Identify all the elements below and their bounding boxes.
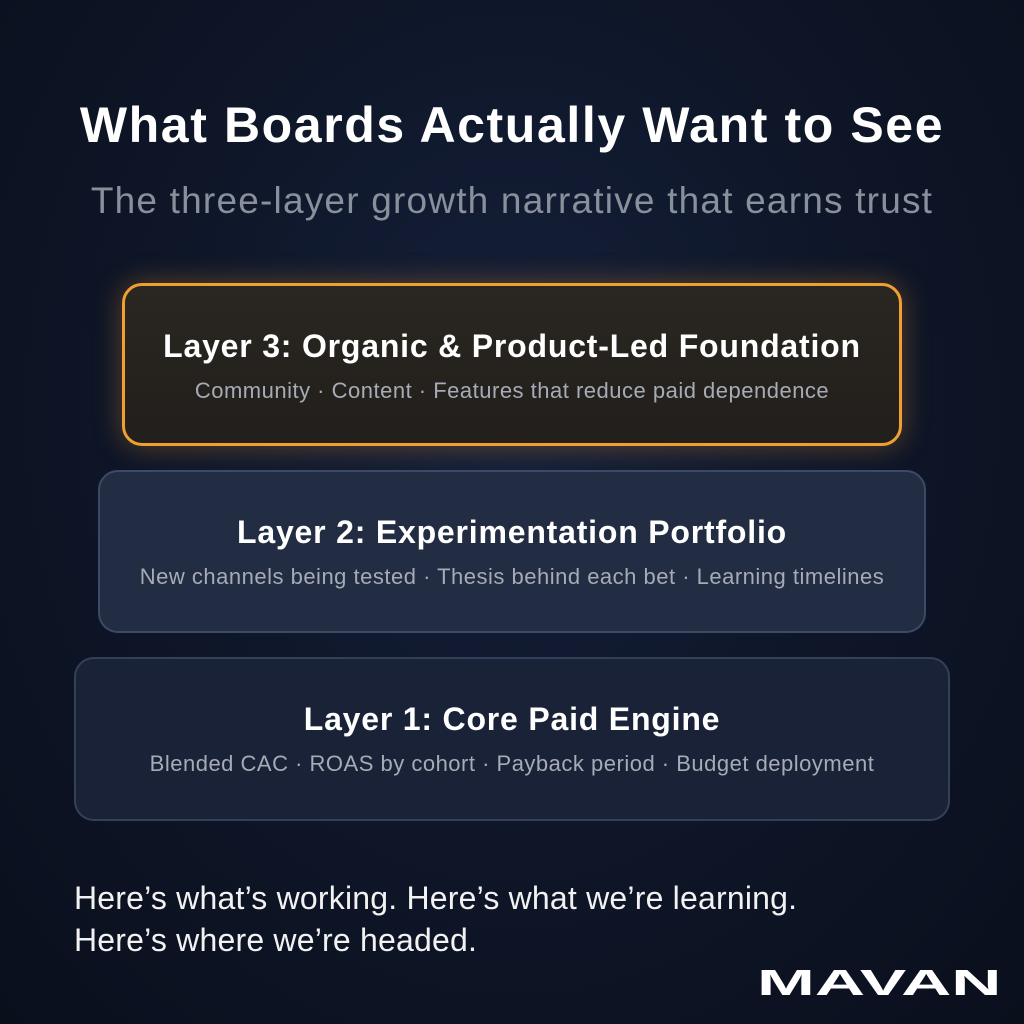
subtitle: The three-layer growth narrative that earns trust bbox=[91, 180, 933, 221]
footer text: Here’s where we’re headed. bbox=[74, 922, 477, 958]
panel: layer 2 bbox=[98, 470, 926, 633]
text: layer 1 details: Blended CAC · ROAS by cohort · Payback period · Budget deployment bbox=[150, 751, 874, 776]
footer text bbox=[74, 880, 797, 958]
logo: MAVAN bbox=[757, 962, 1001, 1003]
panel: layer 3 bbox=[122, 283, 902, 446]
panel: layer 1 bbox=[74, 657, 950, 821]
heading: layer 2: Layer 2: Experimentation Portfolio bbox=[237, 514, 787, 550]
text: layer 2 details: New channels being tested · Thesis behind each bet · Learning timelines bbox=[140, 564, 884, 589]
footer text: Here’s what’s working. Here’s what we’re learning. bbox=[74, 880, 797, 916]
title: What Boards Actually Want to See bbox=[80, 97, 944, 153]
text: layer 3 details: Community · Content · Features that reduce paid dependence bbox=[195, 378, 829, 403]
heading: layer 3: Layer 3: Organic & Product-Led Foundation bbox=[163, 328, 861, 364]
heading: layer 1: Layer 1: Core Paid Engine bbox=[304, 701, 720, 737]
